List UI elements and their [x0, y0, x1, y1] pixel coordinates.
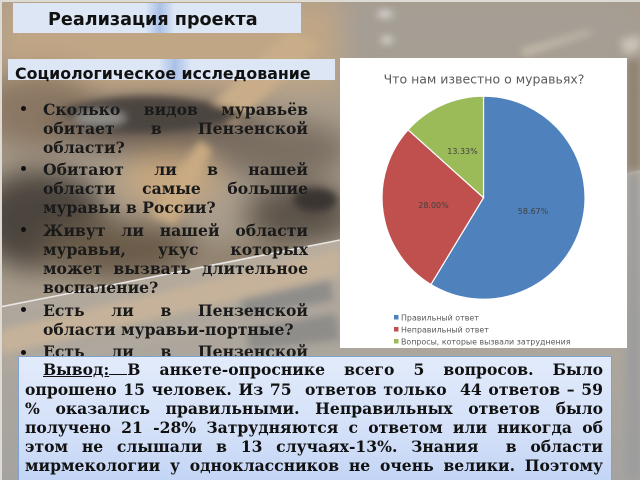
conclusion box: % оказались правильными. Неправильных ответов было: [25, 399, 603, 418]
bulleted question list: муравьи, укус которых: [43, 240, 308, 259]
legend: Неправильный ответ: [401, 326, 489, 334]
bulleted question list: может вызвать длительное: [43, 259, 308, 278]
section heading: Социологическое исследование: [15, 64, 311, 83]
pie data labels: 13.33%: [447, 147, 478, 156]
pie data labels: 58.67%: [518, 207, 549, 216]
conclusion box: получено 21 -28% Затрудняются с ответом или никогда об: [25, 418, 603, 437]
bulleted question list: Сколько видов муравьёв: [43, 100, 308, 119]
pie data labels: 28.00%: [418, 201, 449, 210]
bulleted question list: Есть ли в Пензенской: [43, 342, 308, 361]
pie chart: [382, 96, 585, 299]
bulleted question list: Есть ли в Пензенской: [43, 301, 308, 320]
bulleted question list: области муравьи-портные?: [43, 320, 294, 339]
conclusion box: [18, 356, 612, 480]
chart title: Что нам известно о муравьях?: [384, 72, 584, 86]
bulleted question list: муравьи в России?: [43, 198, 216, 217]
legend: Вопросы, которые вызвали затруднения: [401, 338, 571, 346]
title: Реализация проекта: [48, 10, 258, 30]
title bar: [13, 3, 301, 33]
bulleted question list: обитает в Пензенской: [43, 119, 308, 138]
conclusion box: Вывод: В анкете-опроснике всего 5 вопросов. Было: [43, 360, 603, 379]
chart panel: [340, 58, 627, 348]
bulleted question list: области самые большие: [43, 179, 308, 198]
section heading bar: [8, 59, 335, 80]
bulleted question list: Обитают ли в нашей: [43, 160, 308, 179]
bulleted question list: Живут ли нашей области: [43, 221, 308, 240]
bulleted question list: области?: [43, 138, 125, 157]
legend: [394, 314, 571, 346]
conclusion box: мирмекологии у одноклассников не очень велики. Поэтому: [25, 456, 603, 475]
conclusion box: этом не слышали в 13 случаях-13%. Знания в области: [25, 437, 603, 456]
conclusion box: опрошено 15 человек. Из 75 ответов только 44 ответов – 59: [25, 380, 603, 399]
pie data labels: [418, 147, 549, 216]
legend: Правильный ответ: [401, 314, 479, 322]
bulleted question list: воспаление?: [43, 278, 158, 297]
bulleted question list: [21, 100, 308, 361]
